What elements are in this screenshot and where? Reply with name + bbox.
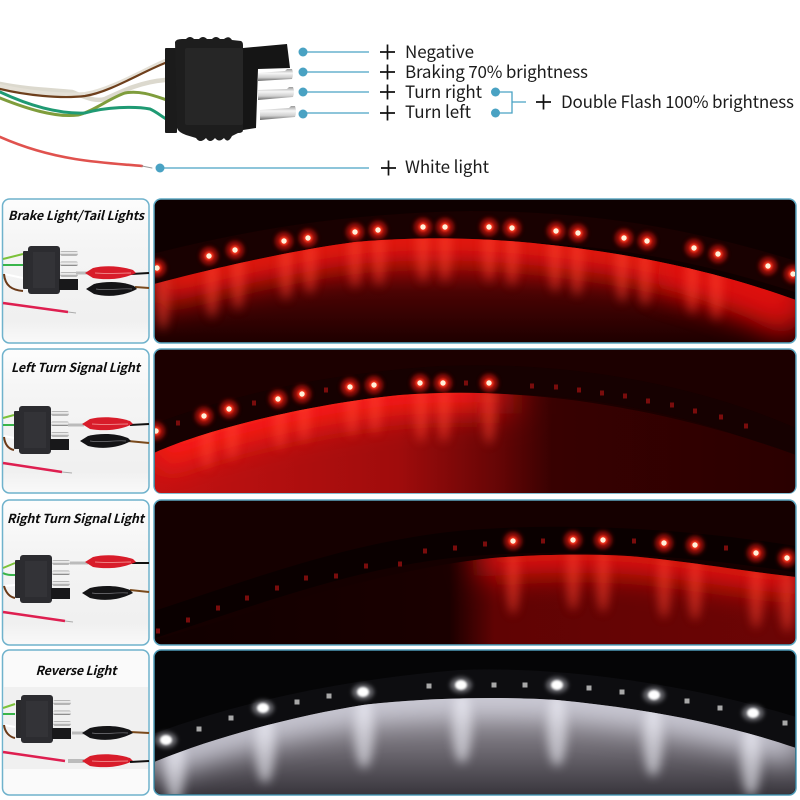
dim SMD chips xyxy=(196,682,788,732)
wiring photo xyxy=(3,406,149,473)
lit floor xyxy=(155,698,795,794)
labels: Braking 70% brightness xyxy=(405,58,588,83)
labels: Turn right xyxy=(405,78,483,103)
labels: Double Flash 100% brightness xyxy=(561,88,794,113)
strip xyxy=(150,540,800,626)
strip xyxy=(150,685,800,752)
panel: left turn wiring xyxy=(2,349,149,493)
panel: brake light strip xyxy=(148,199,800,345)
strip xyxy=(150,379,800,445)
wiring photo xyxy=(3,695,149,767)
labels: Turn left xyxy=(405,98,472,123)
labels xyxy=(405,38,794,178)
wires: harness xyxy=(0,61,168,168)
heading: Right Turn Signal Light xyxy=(7,508,146,527)
lit floor xyxy=(155,554,795,644)
heading: Reverse Light xyxy=(36,660,118,679)
panel: reverse wiring xyxy=(2,650,149,795)
panel: left turn strip xyxy=(147,349,800,495)
LEDs xyxy=(504,531,796,567)
bracket xyxy=(491,88,526,118)
LEDs xyxy=(147,374,498,440)
callout lines xyxy=(156,48,369,172)
heading: Left Turn Signal Light xyxy=(11,357,142,376)
panel: right turn wiring xyxy=(2,500,149,645)
plus markers xyxy=(380,44,551,176)
panel: brake wiring xyxy=(2,199,149,343)
connector plug xyxy=(165,37,296,141)
panel: reverse light strip xyxy=(150,650,800,800)
labels: Negative xyxy=(405,38,474,63)
panel: right turn strip xyxy=(150,500,800,646)
dim SMD chips xyxy=(156,538,728,634)
lit floor xyxy=(155,392,795,493)
wiring diagram xyxy=(0,37,794,178)
labels: White light xyxy=(405,153,490,178)
heading: Brake Light/Tail Lights xyxy=(8,205,146,224)
dim SMD chips xyxy=(176,380,748,428)
wiring photo xyxy=(3,246,149,313)
LEDs xyxy=(155,677,764,748)
wiring photo xyxy=(3,555,149,622)
LEDs xyxy=(148,218,800,283)
lit floor xyxy=(155,238,795,342)
strip xyxy=(150,226,800,278)
